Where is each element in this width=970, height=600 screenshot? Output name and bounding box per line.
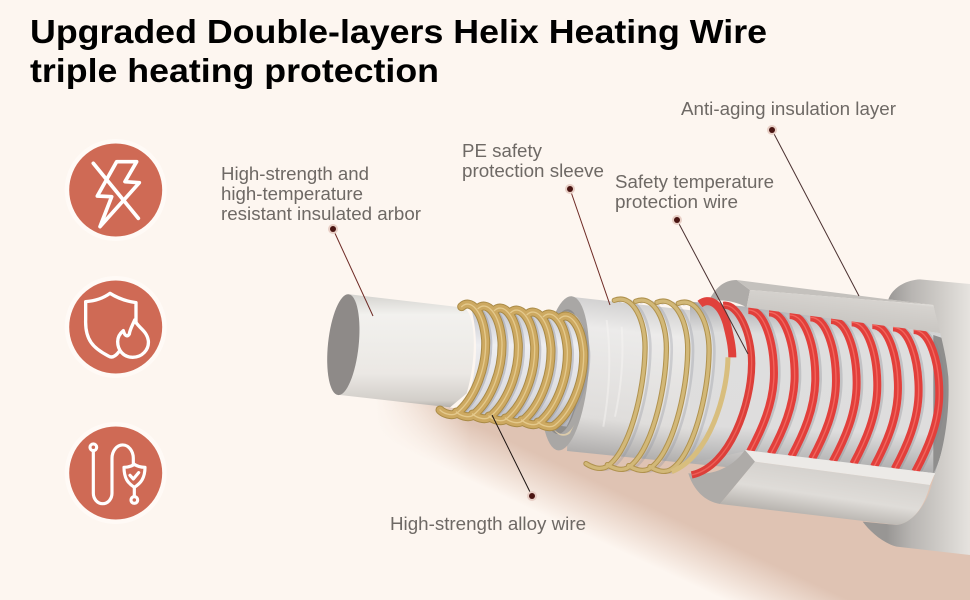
title: Upgraded Double-layers Helix Heating Wire — [30, 13, 767, 50]
icon: wire with safety shield — [65, 422, 167, 524]
leader: arbor — [328, 224, 373, 316]
title: triple heating protection — [30, 52, 439, 89]
bottom cut strip of insulation — [745, 450, 935, 485]
arbor tube — [340, 294, 474, 407]
label: PE sleeve: PE safety — [462, 141, 542, 161]
leader: alloy wire — [492, 415, 537, 501]
arbor and tight gold alloy coil — [323, 293, 589, 427]
top cut strip of insulation — [737, 280, 933, 305]
arbor opening — [323, 293, 364, 397]
icon: no electric shock — [65, 139, 167, 241]
dark far end of the window — [933, 335, 949, 473]
label: alloy wire: High-strength alloy wire — [390, 514, 586, 534]
red helix heating wire — [748, 310, 945, 472]
tube shadows beside loose coils — [591, 300, 714, 472]
label: PE sleeve — [462, 141, 604, 181]
cutaway section traced — [586, 279, 970, 555]
PE sleeve body — [535, 294, 760, 470]
label: safety wire: Safety temperature — [615, 172, 774, 192]
loose gold safety wire — [586, 299, 709, 471]
label: arbor: High-strength and — [221, 164, 369, 184]
label: PE sleeve: protection sleeve — [462, 161, 604, 181]
gold coil turns — [440, 304, 589, 427]
heating wire cutaway illustration — [323, 279, 970, 555]
label: arbor: resistant insulated arbor — [221, 204, 421, 224]
label: safety wire — [615, 172, 774, 212]
inner tube behind the heating wire — [690, 302, 949, 473]
label: insulation: Anti-aging insulation layer — [681, 99, 896, 119]
leader: safety wire — [672, 215, 748, 354]
icon: fire shield — [65, 276, 167, 378]
label: safety wire: protection wire — [615, 192, 738, 212]
larger outer sheath — [863, 279, 970, 555]
label: arbor: high-temperature — [221, 184, 363, 204]
cast shadow under the wire — [355, 385, 970, 600]
safety wire front turns — [672, 301, 752, 475]
label: arbor — [221, 164, 421, 224]
lower insulation body — [720, 462, 930, 525]
leader: insulation layer — [767, 125, 859, 296]
leader: PE sleeve — [565, 184, 610, 305]
wound core — [460, 310, 582, 427]
outer insulation front rim — [708, 280, 750, 307]
title — [30, 13, 767, 89]
